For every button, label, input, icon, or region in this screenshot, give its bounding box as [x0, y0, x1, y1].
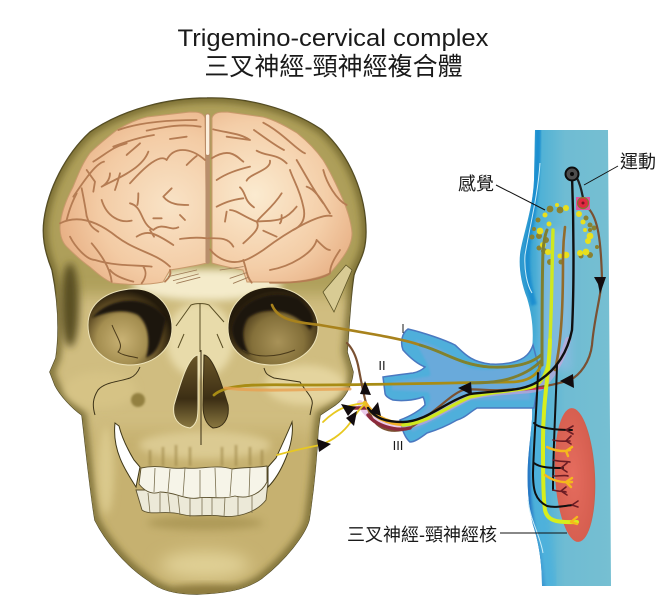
orange thick fibre — [365, 403, 403, 424]
label: sensory: 感覺 — [458, 173, 494, 194]
black main fibre — [368, 175, 574, 422]
title: Trigemino-cervical complex — [178, 25, 489, 52]
olive ascending fibre — [542, 230, 547, 365]
nasal cavity — [174, 350, 228, 445]
left hemisphere — [60, 112, 207, 284]
label: nucleus: 三叉神經-頸神經核 — [347, 525, 497, 545]
labels — [347, 152, 656, 545]
ganglion inner tint — [392, 340, 530, 432]
spinal column — [520, 125, 611, 590]
arrowheads — [317, 277, 606, 452]
nucleus — [552, 407, 598, 543]
motor fibre — [347, 208, 602, 431]
branch label I: I — [402, 321, 404, 336]
cells — [566, 168, 590, 210]
branch label II: II — [378, 358, 386, 373]
brain folds — [60, 116, 347, 283]
skull silhouette — [43, 98, 366, 594]
motor cell body — [576, 197, 590, 210]
title — [178, 25, 489, 81]
sensory ring of dots — [530, 203, 599, 265]
teeth — [136, 466, 268, 517]
nerve I — [272, 305, 541, 367]
sensory cell body — [566, 168, 578, 180]
nerve II — [214, 360, 542, 395]
title: 三叉神經-頸神經複合體 — [204, 53, 463, 81]
branch label III: III — [393, 438, 403, 453]
leader lines — [496, 166, 618, 533]
spinal body — [520, 130, 611, 586]
black descending fibres — [533, 373, 573, 507]
brown red companion fibre — [347, 408, 410, 429]
highlight lines — [525, 163, 543, 553]
skull illustration — [30, 98, 380, 600]
maxilla root ridges — [150, 445, 262, 466]
sutures — [93, 367, 312, 415]
right temporal bone — [323, 265, 352, 312]
jaw gaps — [115, 422, 292, 487]
skull shading — [30, 98, 380, 600]
nerve halos — [360, 340, 568, 426]
facial yellow lines — [277, 404, 365, 455]
left orbit — [88, 289, 172, 365]
motor stem — [577, 178, 583, 198]
right orbit — [228, 287, 318, 365]
trigeminal ganglion — [383, 329, 540, 442]
label: motor: 運動 — [620, 152, 656, 172]
nasal bones — [176, 303, 224, 352]
right hemisphere — [212, 112, 352, 282]
brain — [60, 112, 352, 284]
nerves — [214, 175, 602, 524]
yellow main fibre — [403, 230, 553, 425]
nucleus terminals — [553, 426, 578, 507]
brown ascending fibre — [555, 227, 565, 370]
